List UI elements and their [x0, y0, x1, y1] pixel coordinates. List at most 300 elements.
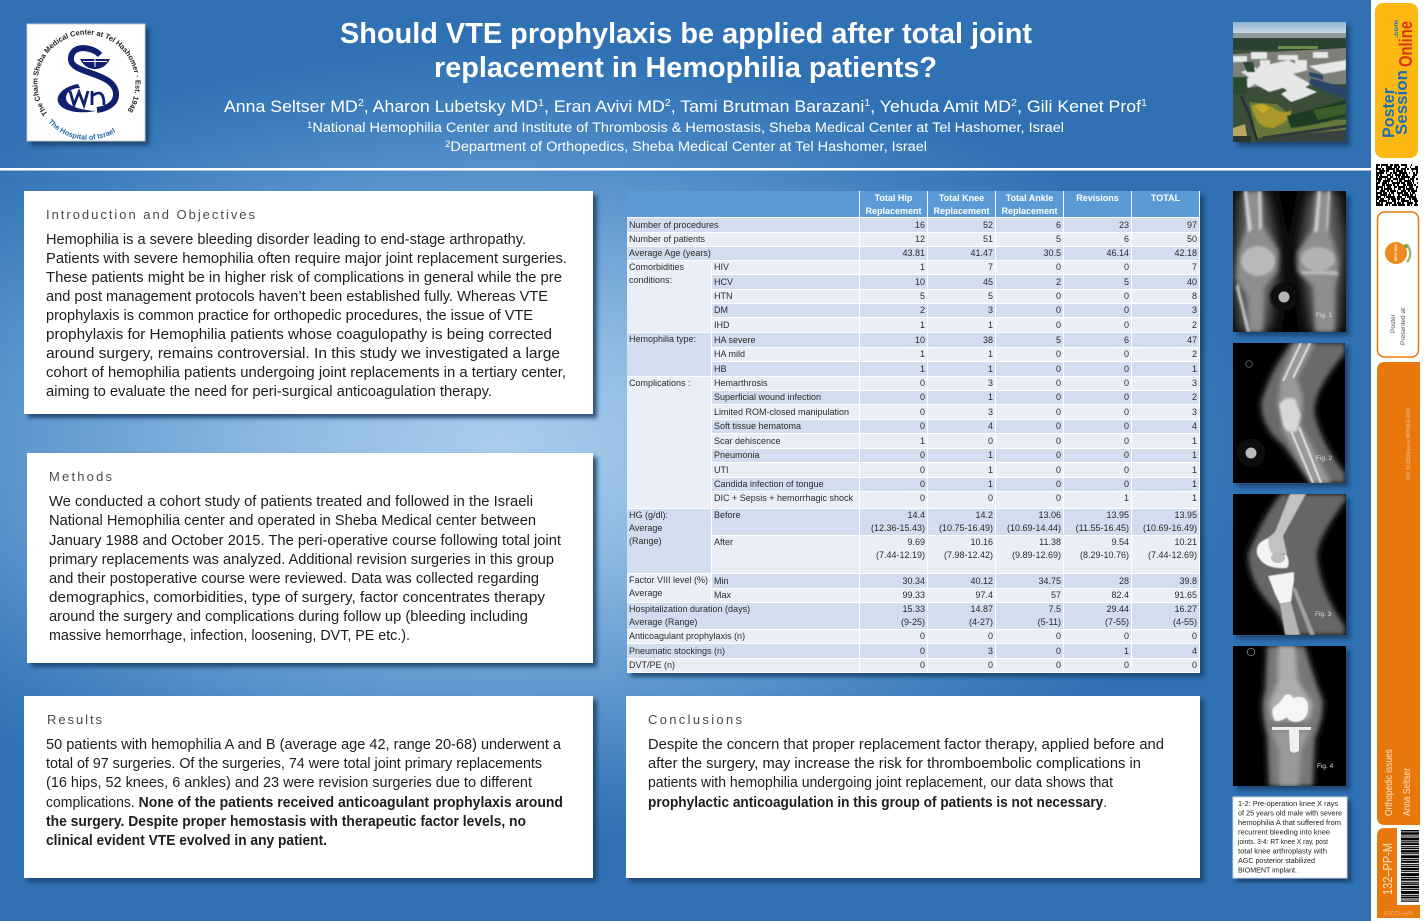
rows: general counts: 5	[1056, 234, 1061, 244]
rows: comorbidities: 2	[1056, 276, 1061, 286]
rows: hemoglobin: HG (g/dl):	[629, 510, 668, 520]
conclusions body text	[648, 737, 1164, 811]
intro body text: cohort of hemophilia patients undergoing joint replacements in a tertiary center,	[46, 365, 566, 381]
rows: general counts: 16	[915, 220, 925, 230]
DOI text: DOI: 10.3252/pso.eu.WFH2016.2016	[1406, 408, 1412, 480]
methods body text: January 1988 and October 2015. The peri-operative course following total joint	[49, 533, 561, 549]
rows: comorbidities: 10	[915, 276, 925, 286]
methods body text: and their postoperative course were reviewed. Data was collected regarding	[49, 571, 539, 587]
title	[340, 18, 1032, 84]
caption for figures: recurrent bleeding into knee	[1238, 830, 1330, 836]
conclusions body text: prophylactic anticoagulation in this group of patients is not necessary.	[648, 795, 1107, 811]
QR code	[1375, 163, 1419, 207]
intro body text: aiming to evaluate the need for peri-surgical anticoagulation therapy.	[46, 384, 492, 400]
rows: complications: 0	[920, 450, 925, 460]
rows: general counts: 30.5	[1043, 248, 1061, 258]
poster id: 132–PP-M	[1380, 843, 1395, 895]
rows: complications: 1	[1192, 493, 1197, 503]
caption for figures: hemophilia A that suffered from	[1238, 820, 1341, 827]
photo: hospital aerial view	[1233, 22, 1346, 142]
logo: Sheba Medical Center: The Hospital of Israel	[49, 118, 116, 140]
rows: comorbidities: 7	[988, 262, 993, 272]
results body text: 50 patients with hemophilia A and B (average age 42, range 20-68) underwent a	[46, 737, 562, 753]
rows: factor VIII level: Factor VIII level (%)	[629, 575, 708, 585]
rows: complications: 0	[1124, 436, 1129, 446]
intro body text: Hemophilia is a severe bleeding disorder leading to end-stage arthropathy.	[46, 232, 526, 248]
rows: hospitalization and outcomes: 0	[920, 646, 925, 656]
rows: comorbidities: 3	[1192, 305, 1197, 315]
rows: general counts: 6	[1056, 220, 1061, 230]
rows: complications: 0	[1124, 378, 1129, 388]
rows: complications: 1	[920, 436, 925, 446]
rows: factor VIII level: 82.4	[1111, 590, 1129, 600]
rows: comorbidities: 0	[1124, 320, 1129, 330]
authors: 1	[864, 98, 871, 109]
results body text: clinical evident VTE evolved in any patient.	[46, 833, 327, 849]
rows: factor VIII level: 99.33	[902, 590, 925, 600]
sidebar: PosterSessionOnline badge: Online	[1396, 21, 1416, 67]
divider line under header	[0, 168, 1371, 170]
sidebar: PosterSessionOnline badge: Session	[1392, 70, 1411, 135]
rows: hospitalization and outcomes: 0	[988, 660, 993, 670]
sidebar: poster id and barcode	[1377, 828, 1420, 918]
rows: complications: 0	[920, 406, 925, 416]
rows: hospitalization and outcomes: Hospitalization duration (days)	[629, 604, 750, 614]
presented at text: Presented at:	[1400, 306, 1407, 345]
methods body text: primary replacements was analyzed. Additional revision surgeries in this group	[49, 552, 554, 568]
rows: hospitalization and outcomes: 0	[1124, 631, 1129, 641]
intro body text: prophylaxis for Hemophilia patients whose coagulopathy is being corrected	[46, 327, 552, 343]
icon: congress logo	[1385, 242, 1410, 264]
label: Fig. 2: Fig. 2	[1316, 455, 1333, 462]
table header row: Replacement	[1001, 206, 1058, 216]
rows: hemophilia type: 47	[1187, 334, 1197, 344]
rows: hemophilia type: 38	[983, 334, 993, 344]
rows: comorbidities: 40	[1187, 276, 1197, 286]
rows: comorbidities: 5	[988, 291, 993, 301]
rows: complications: 0	[920, 378, 925, 388]
barcode	[1397, 828, 1420, 905]
rows: hospitalization and outcomes: 1	[1124, 646, 1129, 656]
sidebar: presented at card	[1378, 212, 1418, 357]
rows: hemoglobin: 13.95	[1174, 510, 1197, 520]
rows: complications: 0	[1056, 464, 1061, 474]
rows: hemoglobin: (12.36-15.43)	[871, 523, 925, 533]
rows: complications: Scar dehiscence	[714, 436, 781, 446]
rows: complications: 4	[1192, 421, 1197, 431]
intro body text: prophylaxis is common practice for orthopedic procedures, the issue of VTE	[46, 308, 533, 324]
rows: complications: 3	[1192, 406, 1197, 416]
rows: hemoglobin: (7.44-12.69)	[1148, 550, 1197, 560]
rows: hospitalization and outcomes: (7-55)	[1105, 617, 1129, 627]
rows: hospitalization and outcomes: 4	[1192, 646, 1197, 656]
rows: complications: 1	[988, 464, 993, 474]
caption for figures: 1-2: Pre-operation knee X rays	[1238, 801, 1339, 808]
caption for figures	[1233, 797, 1347, 878]
rows: hospitalization and outcomes: (9-25)	[901, 617, 925, 627]
affiliations: 2	[445, 139, 450, 149]
rows: complications: DIC + Sepsis + hemorrhagic shock	[714, 493, 853, 503]
rows: comorbidities: 0	[1124, 291, 1129, 301]
rows: comorbidities: 2	[920, 305, 925, 315]
authors: 2	[1011, 98, 1017, 109]
rows: factor VIII level: 34.75	[1038, 576, 1061, 586]
x-ray: figure 4 frontal prosthesis	[1233, 646, 1346, 786]
sidebar: PosterSessionOnline badge	[1375, 3, 1418, 158]
rows: comorbidities: 45	[983, 276, 993, 286]
rows: hemophilia type: 2	[1192, 349, 1197, 359]
rows: complications: 2	[1192, 392, 1197, 402]
intro body text	[46, 232, 567, 400]
label: Fig. 1: Fig. 1	[1316, 312, 1333, 319]
label: Fig. 4: Fig. 4	[1317, 763, 1334, 770]
rows: hemoglobin: Average	[629, 523, 662, 533]
rows: hemoglobin: (10.69-16.49)	[1143, 523, 1197, 533]
rows: hemoglobin: After	[714, 537, 733, 547]
rows: complications: 3	[988, 406, 993, 416]
rows: hemophilia type: 10	[915, 334, 925, 344]
table header row: Revisions	[1076, 193, 1119, 203]
rows: comorbidities: DM	[714, 305, 728, 315]
rows: comorbidities: IHD	[714, 320, 730, 330]
rows: comorbidities: 0	[1056, 291, 1061, 301]
rows: hemoglobin: (10.75-16.49)	[939, 523, 993, 533]
rows: hospitalization and outcomes: 14.87	[970, 604, 993, 614]
rows: general counts: 41.47	[970, 248, 993, 258]
rows: general counts: 23	[1119, 220, 1129, 230]
rows: factor VIII level: 57	[1051, 590, 1061, 600]
heading: methods: Methods	[49, 469, 112, 484]
intro body text: Patients with severe hemophilia often require major joint replacement surgeries.	[46, 251, 567, 267]
rows: factor VIII level: 91.65	[1174, 590, 1197, 600]
rows: complications: 1	[1192, 479, 1197, 489]
rows: hospitalization and outcomes: Anticoagulant prophylaxis (n)	[629, 631, 745, 641]
heading: results: Results	[47, 712, 102, 727]
rows: complications: 0	[920, 464, 925, 474]
rows: hemoglobin: 14.2	[975, 510, 993, 520]
methods body text: demographics, comorbidities, type of surgery, factor concentrates therapy	[49, 590, 546, 606]
rows: hemophilia type: 5	[1056, 334, 1061, 344]
rows: hemoglobin: 13.06	[1038, 510, 1061, 520]
authors: 2	[665, 98, 671, 109]
rows: complications: 0	[1056, 493, 1061, 503]
rows: hospitalization and outcomes: 0	[1056, 631, 1061, 641]
intro body text: around surgery, remains controversial. In this study we investigated a large	[46, 346, 560, 362]
WFH2016 mirrored label: WFH2016	[1383, 909, 1413, 916]
icon: congress logo: WFH 2016	[1394, 244, 1398, 261]
rows: hospitalization and outcomes: Pneumatic stockings (n)	[629, 646, 725, 656]
rows: complications: 0	[1124, 421, 1129, 431]
rows: hemophilia type	[627, 333, 1200, 377]
rows: complications: Superficial wound infection	[714, 392, 821, 402]
title: replacement in Hemophilia patients?	[434, 52, 937, 84]
label: Fig. 3: Fig. 3	[1315, 611, 1332, 618]
table header row	[627, 191, 1200, 218]
rows: complications: 0	[1056, 479, 1061, 489]
rows: hospitalization and outcomes: (4-27)	[969, 617, 993, 627]
rows: comorbidities: 5	[1124, 276, 1129, 286]
rows: factor VIII level: 28	[1119, 576, 1129, 586]
caption for figures: joints. 3-4: RT knee X ray, post	[1237, 839, 1328, 846]
rows: hospitalization and outcomes: (4-55)	[1173, 617, 1197, 627]
rows: general counts: 46.14	[1106, 248, 1129, 258]
rows: comorbidities: HTN	[714, 291, 732, 301]
panel: methods	[27, 453, 593, 663]
rows: hospitalization and outcomes: 16.27	[1174, 604, 1197, 614]
rows: complications: UTI	[714, 464, 728, 474]
rows: general counts: Average Age (years)	[629, 248, 711, 258]
table header row: Replacement	[865, 206, 922, 216]
rows: factor VIII level: Max	[714, 590, 731, 600]
rows: hemophilia type: 1	[988, 349, 993, 359]
authors: , Yehuda Amit MD	[870, 98, 1011, 116]
rows: general counts: 51	[983, 234, 993, 244]
intro body text: These patients might be in higher risk of complications in general while the pre	[46, 270, 562, 286]
rows: comorbidities: 0	[1056, 262, 1061, 272]
rows: hemophilia type: 6	[1124, 334, 1129, 344]
rows: hospitalization and outcomes: DVT/PE (n)	[629, 660, 675, 670]
rows: complications: 1	[988, 450, 993, 460]
rows: complications: 0	[1124, 392, 1129, 402]
rows: complications: 0	[1124, 464, 1129, 474]
rows: general counts	[627, 218, 1200, 261]
rows: hemoglobin: (7.98-12.42)	[944, 550, 993, 560]
caption for figures: of 25 years old male with severe	[1238, 810, 1342, 818]
rows: complications: 0	[1056, 406, 1061, 416]
rows: general counts: Number of patients	[629, 234, 705, 244]
rows: hemoglobin: (Range)	[629, 536, 662, 546]
rows: complications: 1	[1192, 436, 1197, 446]
rows: hemoglobin	[627, 509, 1200, 574]
table header row: Total Hip	[875, 193, 912, 203]
authors: , Gili Kenet Prof	[1017, 98, 1141, 116]
authors: 1	[1141, 98, 1147, 109]
conclusions body text: after the surgery, may increase the risk for thromboembolic complications in	[648, 756, 1141, 772]
rows: complications: 0	[920, 421, 925, 431]
rows: complications: 0	[920, 392, 925, 402]
author text: Anna Seltser	[1402, 767, 1413, 816]
rows: factor VIII level: Average	[629, 588, 662, 598]
conclusions body text: patients with hemophilia undergoing joint replacement, our data shows that	[648, 775, 1113, 791]
rows: hemoglobin: Before	[714, 510, 741, 520]
rows: comorbidities: 3	[988, 305, 993, 315]
rows: complications: 0	[988, 436, 993, 446]
affiliations: Department of Orthopedics, Sheba Medical Center at Tel Hashomer, Israel	[450, 139, 927, 154]
rows: comorbidities: 2	[1192, 320, 1197, 330]
rows: hemophilia type: 0	[1124, 349, 1129, 359]
affiliations: 1	[307, 120, 312, 130]
panel: introduction and objectives	[24, 191, 593, 414]
panel: conclusions	[626, 696, 1200, 878]
rows: complications	[627, 377, 1200, 509]
rows: complications: 0	[1124, 406, 1129, 416]
rows: factor VIII level: Min	[714, 576, 729, 586]
rows: general counts: 42.18	[1174, 248, 1197, 258]
rows: hospitalization and outcomes: 0	[1192, 660, 1197, 670]
rows: complications: 1	[988, 392, 993, 402]
rows: hemophilia type: 1	[1192, 364, 1197, 374]
sidebar: PosterSessionOnline badge: Poster	[1379, 88, 1398, 138]
table header row: Total Ankle	[1006, 193, 1053, 203]
rows: factor VIII level: 40.12	[970, 576, 993, 586]
rows: general counts: 43.81	[902, 248, 925, 258]
affiliations: National Hemophilia Center and Institute of Thrombosis & Hemostasis, Sheba Medical Center at Tel Hashomer, Israel	[312, 120, 1064, 135]
rows: complications: Pneumonia	[714, 450, 760, 460]
intro body text: and post management protocols haven’t been established fully. Whereas VTE	[46, 289, 548, 305]
methods body text: around the surgery and complications during follow up (bleeding including	[49, 609, 528, 625]
rows: hemophilia type: HA mild	[714, 349, 745, 359]
rows: hemoglobin: 14.4	[907, 510, 925, 520]
table shadow backing	[627, 191, 1200, 673]
table: patient data	[627, 191, 1200, 673]
authors: Anna Seltser MD	[224, 98, 349, 116]
affiliations	[307, 120, 1064, 154]
rows: hospitalization and outcomes: 0	[1056, 646, 1061, 656]
results body text: the surgery. Despite proper hemostasis with therapeutic factor levels, no	[46, 814, 526, 830]
rows: hospitalization and outcomes: 7.5	[1048, 604, 1061, 614]
conclusions body text: Despite the concern that proper replacement factor therapy, applied before and	[648, 737, 1164, 753]
rows: complications: 0	[920, 479, 925, 489]
panel: results	[24, 696, 593, 878]
rows: complications: Complications :	[629, 378, 691, 388]
rows: complications: 4	[988, 421, 993, 431]
rows: complications: 1	[1124, 493, 1129, 503]
rows: general counts: 6	[1124, 234, 1129, 244]
rows: hemophilia type: HB	[714, 364, 727, 374]
rows: complications: 0	[1056, 421, 1061, 431]
rows: hemoglobin: 11.38	[1039, 537, 1061, 547]
rows: complications: 0	[1124, 450, 1129, 460]
rows: complications: 1	[1192, 464, 1197, 474]
rows: complications: 3	[1192, 378, 1197, 388]
methods body text: massive hemorrhage, infection, loosening, DVT, PE etc.).	[49, 628, 410, 644]
rows: complications: Soft tissue hematoma	[714, 421, 801, 431]
authors: , Aharon Lubetsky MD	[364, 98, 538, 116]
methods body text: We conducted a cohort study of patients treated and followed in the Israeli	[49, 494, 533, 510]
rows: complications: 0	[1056, 450, 1061, 460]
rows: complications: 0	[920, 493, 925, 503]
table header row: Replacement	[933, 206, 990, 216]
rows: comorbidities: Comorbidities	[629, 262, 684, 272]
rows: comorbidities: 7	[1192, 262, 1197, 272]
rows: hospitalization and outcomes: Average (Range)	[629, 617, 697, 627]
rows: hemoglobin: (7.44-12.19)	[876, 550, 925, 560]
rows: comorbidities: 8	[1192, 291, 1197, 301]
rows: general counts: 12	[915, 234, 925, 244]
rows: hemophilia type: Hemophilia type:	[629, 334, 696, 344]
sidebar: orange topic panel	[1377, 362, 1420, 825]
presented at text	[1390, 306, 1407, 345]
rows: complications: 0	[1056, 392, 1061, 402]
rows: factor VIII level: 30.34	[902, 576, 925, 586]
authors: 2	[358, 98, 364, 109]
rows: hemoglobin: 10.21	[1174, 537, 1197, 547]
rows: complications: Candida infection of tongue	[714, 479, 824, 489]
rows: factor VIII level: 97.4	[975, 590, 993, 600]
rows: hemoglobin: 13.95	[1106, 510, 1129, 520]
x-ray: figure 3 lateral prosthesis	[1233, 494, 1346, 635]
rows: comorbidities: 1	[988, 320, 993, 330]
authors: , Eran Avivi MD	[544, 98, 665, 116]
caption for figures: total knee arthroplasty with	[1238, 848, 1327, 856]
table header row: TOTAL	[1151, 193, 1180, 203]
rows: complications: 0	[1124, 479, 1129, 489]
rows: hemoglobin: 10.16	[970, 537, 993, 547]
rows: comorbidities: 0	[1056, 320, 1061, 330]
rows: hemophilia type: 0	[1124, 364, 1129, 374]
rows: complications: 1	[1192, 450, 1197, 460]
rows: hospitalization and outcomes: 29.44	[1106, 604, 1129, 614]
x-ray: figure 2 lateral knee	[1233, 343, 1345, 483]
heading: introduction: Introduction and Objectives	[46, 207, 256, 222]
rows: comorbidities: HCV	[714, 276, 733, 286]
rows: hemophilia type: 0	[1056, 364, 1061, 374]
caption for figures: BIOMENT implant.	[1238, 868, 1297, 874]
rows: hemoglobin: (10.69-14.44)	[1007, 523, 1061, 533]
rows: complications: Limited ROM-closed manipulation	[714, 406, 849, 416]
results body text: complications. None of the patients received anticoagulant prophylaxis around	[46, 795, 563, 811]
rows: hospitalization and outcomes: 0	[988, 631, 993, 641]
results body text: total of 97 surgeries. Of the surgeries, 74 were total joint primary replacements	[46, 756, 542, 772]
x-ray: figure 1 knees	[1233, 191, 1346, 332]
rows: complications: 0	[1056, 436, 1061, 446]
rows: comorbidities	[627, 261, 1200, 333]
rows: hospitalization and outcomes	[627, 603, 1200, 673]
rows: comorbidities: 0	[1124, 262, 1129, 272]
rows: hemoglobin: (8.29-10.76)	[1080, 550, 1129, 560]
presented at text: Poster	[1390, 313, 1397, 333]
methods body text	[49, 494, 561, 644]
rows: hemophilia type: 1	[920, 349, 925, 359]
rows: complications: 0	[988, 493, 993, 503]
rows: hemophilia type: 0	[1056, 349, 1061, 359]
rows: hospitalization and outcomes: 0	[1124, 660, 1129, 670]
rows: complications: Hemarthrosis	[714, 378, 768, 388]
rows: factor VIII level	[627, 574, 1200, 603]
rows: factor VIII level: 39.8	[1179, 576, 1197, 586]
title: Should VTE prophylaxis be applied after total joint	[340, 18, 1032, 50]
rows: general counts: 50	[1187, 234, 1197, 244]
rows: comorbidities: HIV	[714, 262, 729, 272]
rows: comorbidities: conditions:	[629, 275, 672, 285]
rows: general counts: 52	[983, 220, 993, 230]
rows: general counts: 97	[1187, 220, 1197, 230]
rows: hospitalization and outcomes: 0	[920, 631, 925, 641]
rows: hospitalization and outcomes: (5-11)	[1038, 617, 1061, 627]
rows: comorbidities: 1	[920, 262, 925, 272]
rows: complications: 3	[988, 378, 993, 388]
rows: hospitalization and outcomes: 0	[1056, 660, 1061, 670]
rows: hemophilia type: 1	[920, 364, 925, 374]
caption for figures: AGC posterior stabilized	[1238, 858, 1315, 865]
rows: hemoglobin: 9.69	[907, 537, 925, 547]
rows: complications: 1	[988, 479, 993, 489]
rows: general counts: Number of procedures	[629, 220, 719, 230]
methods body text: National Hemophilia center and operated in Sheba Medical center between	[49, 513, 536, 529]
rows: comorbidities: 0	[1124, 305, 1129, 315]
sidebar: PosterSessionOnline badge: .com	[1394, 20, 1400, 38]
rows: comorbidities: 5	[920, 291, 925, 301]
topic text: Orthopedic issues	[1384, 749, 1395, 816]
rows: hemoglobin: (9.89-12.69)	[1012, 550, 1061, 560]
rows: hemophilia type: 1	[988, 364, 993, 374]
rows: hospitalization and outcomes: 3	[988, 646, 993, 656]
results body text	[46, 737, 563, 849]
authors: 1	[538, 98, 544, 109]
rows: hospitalization and outcomes: 0	[1192, 631, 1197, 641]
logo: Sheba Medical Center: The Chaim Sheba Medical Center at Tel Hashomer · Est. 1948	[32, 30, 141, 117]
rows: comorbidities: 0	[1056, 305, 1061, 315]
